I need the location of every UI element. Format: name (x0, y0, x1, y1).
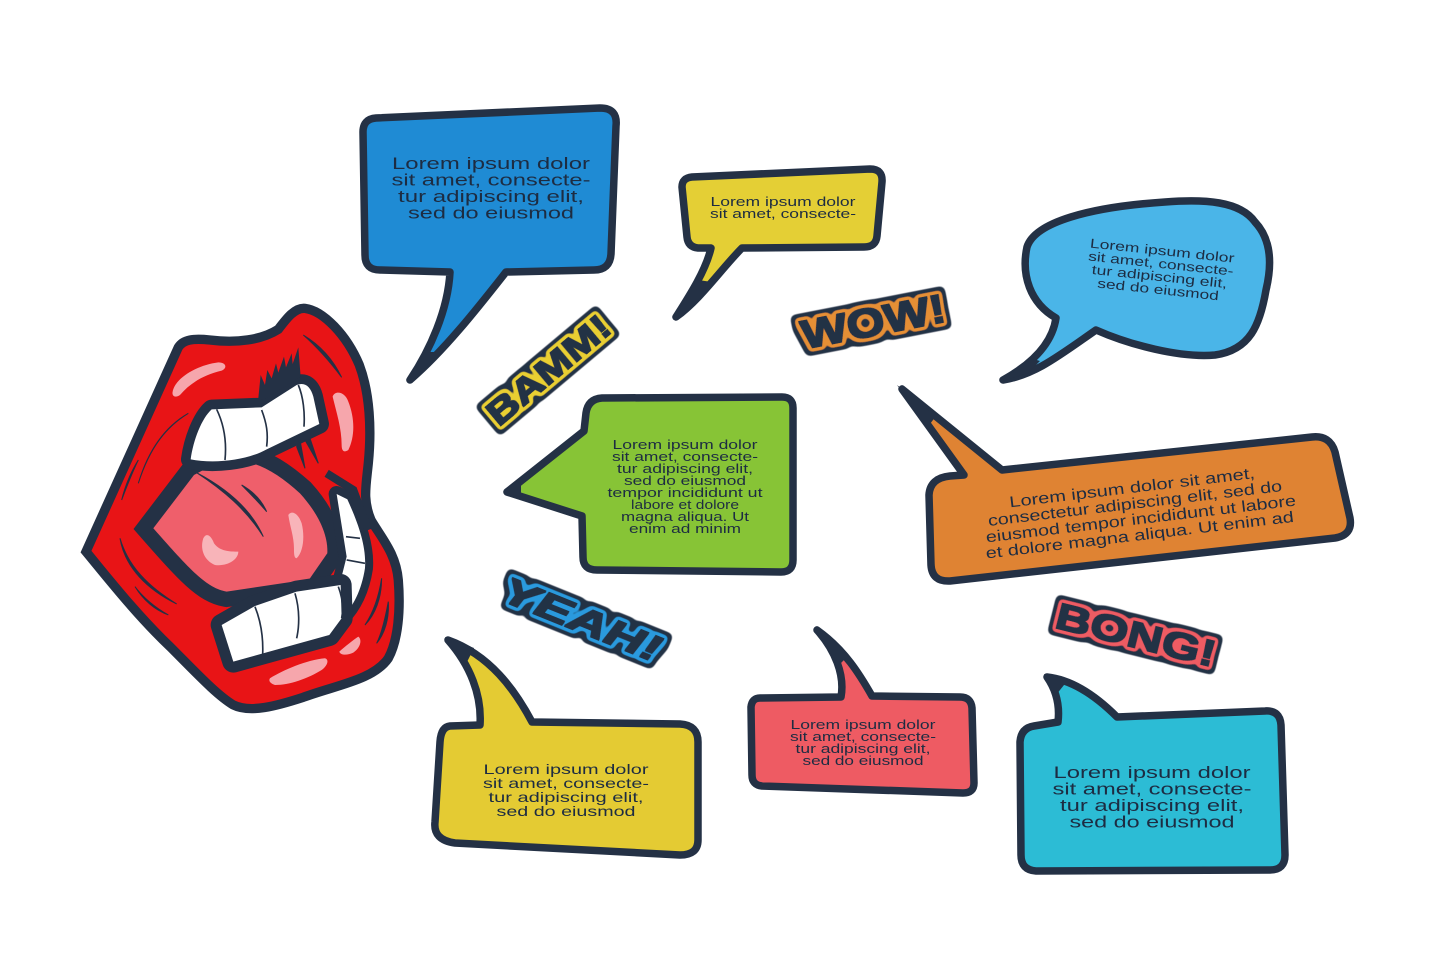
tail tip (407, 352, 442, 382)
bubble text: sit amet, consecte- (1088, 248, 1234, 279)
bubble text: tur adipiscing elit, (1060, 797, 1244, 815)
bubble text: tur adipiscing elit, (796, 742, 930, 756)
tail tip (897, 385, 936, 428)
tongue (153, 463, 327, 592)
tail tip (445, 637, 474, 664)
bubble text: sit amet, consecte- (612, 449, 758, 464)
tail tip (503, 478, 521, 497)
bubble text: Lorem ipsum dolor (392, 155, 591, 173)
tail tip (1044, 674, 1068, 695)
tooth lines (217, 385, 365, 655)
tail tip (673, 280, 712, 320)
bubble shape (507, 397, 793, 572)
speech bubble: light blue (1000, 201, 1270, 382)
bubble text (483, 761, 649, 819)
bubble shape (435, 640, 698, 855)
bubble shape (751, 630, 974, 793)
bubble shape (1003, 201, 1270, 380)
bubble text: sed do eiusmod (802, 754, 924, 768)
right teeth (332, 494, 365, 633)
bubble text: eiusmod tempor incididunt ut labore (985, 493, 1297, 546)
lips (86, 308, 399, 709)
bubble text: sed do eiusmod (1097, 276, 1220, 303)
bubble text: Lorem ipsum dolor (612, 437, 758, 452)
bubble text: sed do eiusmod (1070, 814, 1234, 832)
bubble text: sit amet, consecte- (790, 730, 936, 744)
bubble text: tur adipiscing elit, (1091, 262, 1228, 291)
bubble text: tur adipiscing elit, (617, 461, 753, 476)
tail tip (1000, 358, 1040, 382)
bubble shape (676, 169, 882, 317)
bubble text: sed do eiusmod (624, 473, 746, 488)
bubble text: labore et dolore (631, 497, 739, 512)
tongue highlights (202, 513, 303, 565)
sticker: WOW!: WOW! (798, 287, 949, 358)
lower teeth (222, 585, 342, 662)
bubble text: sit amet, consecte- (710, 207, 856, 221)
speech bubble: teal (1020, 674, 1285, 871)
bubble shape (1020, 677, 1285, 871)
tongue creases (197, 473, 267, 537)
bubble text: sit amet, consecte- (1052, 780, 1252, 798)
speech bubble: green (503, 397, 793, 572)
mouth corner stroke (327, 473, 368, 530)
upper teeth (191, 384, 319, 461)
tail tip (814, 627, 846, 666)
bubble text: et dolore magna aliqua. Ut enim ad (985, 509, 1295, 562)
bubble text (608, 437, 763, 536)
bubble text (790, 718, 936, 768)
sticker: BAMM!: BAMM! (479, 308, 619, 433)
sticker: BONG!: BONG! (1052, 595, 1221, 675)
speech bubble: blue (363, 108, 616, 382)
bubble text: tur adipiscing elit, (398, 188, 584, 206)
bubble text (710, 195, 856, 221)
bubble text: Lorem ipsum dolor sit amet, (1008, 465, 1256, 511)
bubble text (979, 461, 1299, 562)
speech bubble: small yellow (673, 169, 882, 320)
lip highlights (172, 362, 360, 685)
bubble shape (363, 108, 616, 380)
bubble text: sed do eiusmod (408, 204, 574, 222)
speech bubble: bottom yellow (435, 637, 698, 855)
bubble text: tempor incididunt ut (608, 485, 763, 500)
speech bubble: red (751, 627, 974, 793)
bubble text: sed do eiusmod (496, 803, 636, 819)
bubble text (1052, 764, 1252, 832)
bubble text: Lorem ipsum dolor (484, 761, 649, 777)
speech bubble: orange (897, 385, 1350, 581)
bubble text: Lorem ipsum dolor (1054, 764, 1251, 782)
sticker: YEAH!: YEAH! (496, 569, 667, 670)
bubble text: Lorem ipsum dolor (790, 718, 936, 732)
illustration: open red lips with teeth and tongue (86, 308, 399, 709)
bubble text: Lorem ipsum dolor (1089, 236, 1236, 266)
bubble shape (902, 389, 1350, 581)
lashes (258, 347, 301, 400)
bubble text: enim ad minim (629, 521, 741, 536)
bubble text (1085, 236, 1236, 305)
bubble text: consectetur adipiscing elit, sed do (987, 478, 1283, 530)
bubble text: sit amet, consecte- (483, 775, 649, 791)
bubble text: sit amet, consecte- (392, 172, 590, 190)
lip creases (120, 335, 388, 643)
bubble text: magna aliqua. Ut (621, 509, 750, 524)
bubble text (392, 155, 591, 222)
bubble text: Lorem ipsum dolor (710, 195, 856, 209)
bubble text: tur adipiscing elit, (488, 789, 644, 805)
